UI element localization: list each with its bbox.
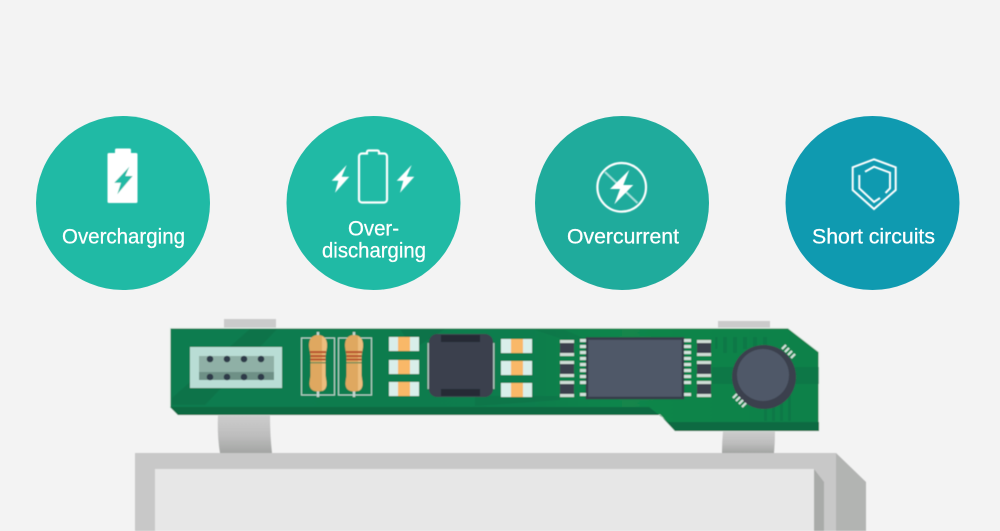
battery tabs: lower ends bbox=[218, 415, 775, 453]
label: Overcurrent: Overcurrent bbox=[567, 226, 679, 248]
icon: empty battery with two bolts bbox=[332, 150, 414, 202]
circuit board bbox=[170, 328, 819, 431]
label: Short circuits: Short circuits bbox=[812, 226, 935, 248]
display chip with pins bbox=[580, 338, 691, 398]
icon: full battery with bolt bbox=[108, 148, 138, 203]
circle: short circuits bbox=[786, 116, 960, 290]
label: Over-discharging: Over- bbox=[348, 218, 399, 240]
icon: shield bbox=[853, 159, 896, 209]
panel: protection functions bbox=[36, 116, 960, 290]
small transistors: right bbox=[697, 340, 711, 397]
capacitors: right column bbox=[501, 339, 532, 397]
circle: over-discharging bbox=[286, 116, 460, 290]
icon: crossed-out bolt bbox=[597, 163, 646, 212]
battery cell bbox=[135, 453, 866, 531]
connector bbox=[190, 347, 282, 388]
resistor 2 bbox=[338, 332, 372, 397]
label: Overcharging: Overcharging bbox=[62, 226, 185, 248]
battery tabs: upper ends bbox=[224, 319, 770, 329]
resistor 1 bbox=[302, 332, 334, 397]
battery with tabs and protection board bbox=[135, 319, 866, 531]
board traces and shading bbox=[170, 329, 819, 431]
microchip bbox=[428, 334, 494, 397]
circle: overcharging bbox=[36, 116, 210, 290]
round component bbox=[732, 345, 796, 409]
small transistors: left bbox=[560, 340, 574, 397]
label: Over-discharging: discharging bbox=[322, 240, 426, 262]
capacitors: left column bbox=[389, 337, 419, 396]
circle: overcurrent bbox=[535, 116, 709, 290]
